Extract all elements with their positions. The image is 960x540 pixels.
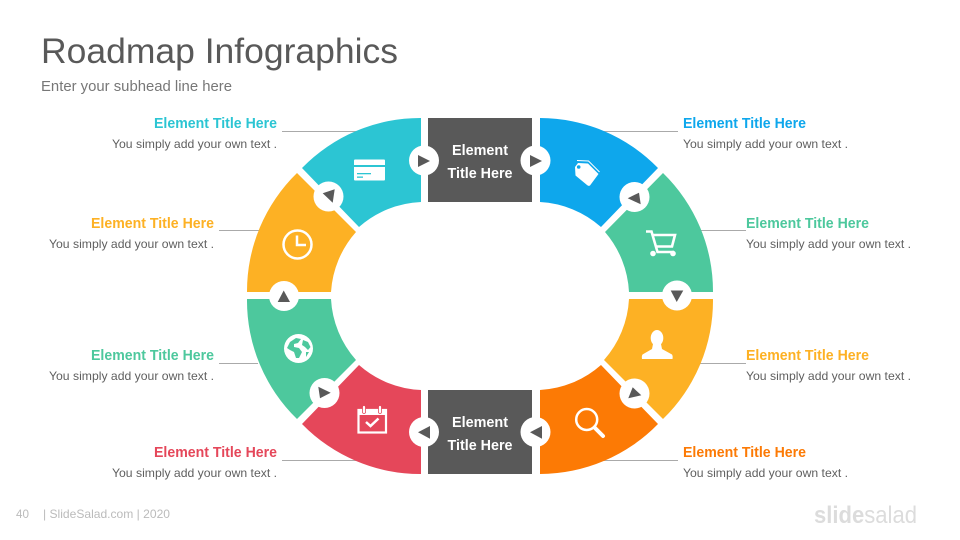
icon: clock	[284, 230, 312, 258]
icon: person	[642, 330, 673, 359]
label: green element left	[49, 347, 214, 383]
label: yellow element: You simply add your own text .	[49, 237, 214, 251]
bottom grey box: Title Here	[448, 437, 512, 454]
label: yellow element	[49, 215, 214, 251]
connector: top left arrow	[409, 146, 439, 176]
segment: blue	[540, 118, 658, 227]
footer page number: 40	[16, 507, 29, 521]
segment: yellow lower right	[604, 299, 713, 419]
label: red element	[112, 444, 277, 480]
label: yellow element right: Element Title Here	[746, 347, 869, 364]
icon: price tag	[575, 160, 600, 186]
top grey box	[428, 118, 532, 202]
segment: green lower left	[247, 299, 356, 419]
title: Roadmap Infographics	[41, 32, 398, 71]
footer credit: | SlideSalad.com | 2020	[43, 507, 170, 521]
connector: lower left diagonal arrow	[310, 378, 340, 408]
label: blue element	[683, 115, 848, 151]
segment: red	[302, 365, 421, 474]
icon: magnifier	[576, 409, 603, 436]
label: green element left: You simply add your own text .	[49, 369, 214, 383]
label: yellow element right: You simply add your own text .	[746, 369, 911, 383]
label: green element right: You simply add your own text .	[746, 237, 911, 251]
icon: shopping cart	[646, 232, 675, 255]
label: teal element: Element Title Here	[154, 115, 277, 132]
connector: upper right diagonal arrow	[620, 182, 650, 212]
segment: orange	[540, 365, 658, 474]
bottom grey box	[428, 390, 532, 474]
subhead: Enter your subhead line here	[41, 78, 232, 95]
connector: lower right diagonal arrow	[620, 378, 650, 408]
label: blue element: You simply add your own text .	[683, 137, 848, 151]
connector: bottom left arrow	[409, 417, 439, 447]
label: green element right: Element Title Here	[746, 215, 869, 232]
label: yellow element: Element Title Here	[91, 215, 214, 232]
label: orange element: You simply add your own text .	[683, 466, 848, 480]
connector: bottom right arrow	[520, 417, 550, 447]
top grey box: Element	[452, 142, 508, 159]
connector: top right arrow	[520, 146, 550, 176]
label: orange element: Element Title Here	[683, 444, 806, 461]
label: teal element	[112, 115, 277, 151]
connector: right down arrow	[662, 280, 692, 310]
label: green element left: Element Title Here	[91, 347, 214, 364]
logo: slidesalad	[814, 502, 917, 529]
icon: credit card	[354, 160, 385, 180]
connector: left up arrow	[269, 281, 299, 311]
icon: globe	[284, 334, 313, 363]
segment: green upper right	[605, 173, 713, 292]
segment: teal	[302, 118, 421, 227]
label: blue element: Element Title Here	[683, 115, 806, 132]
bottom grey box: Element	[452, 414, 508, 431]
segment: yellow upper left	[247, 173, 356, 292]
label: red element: Element Title Here	[154, 444, 277, 461]
label: yellow element right	[746, 347, 911, 383]
label: teal element: You simply add your own text .	[112, 137, 277, 151]
label: green element right	[746, 215, 911, 251]
top grey box: Title Here	[448, 165, 512, 182]
label: orange element	[683, 444, 848, 480]
icon: calendar	[358, 406, 386, 432]
label: red element: You simply add your own text .	[112, 466, 277, 480]
leader lines	[219, 132, 746, 460]
connector: upper left diagonal arrow	[314, 182, 344, 212]
